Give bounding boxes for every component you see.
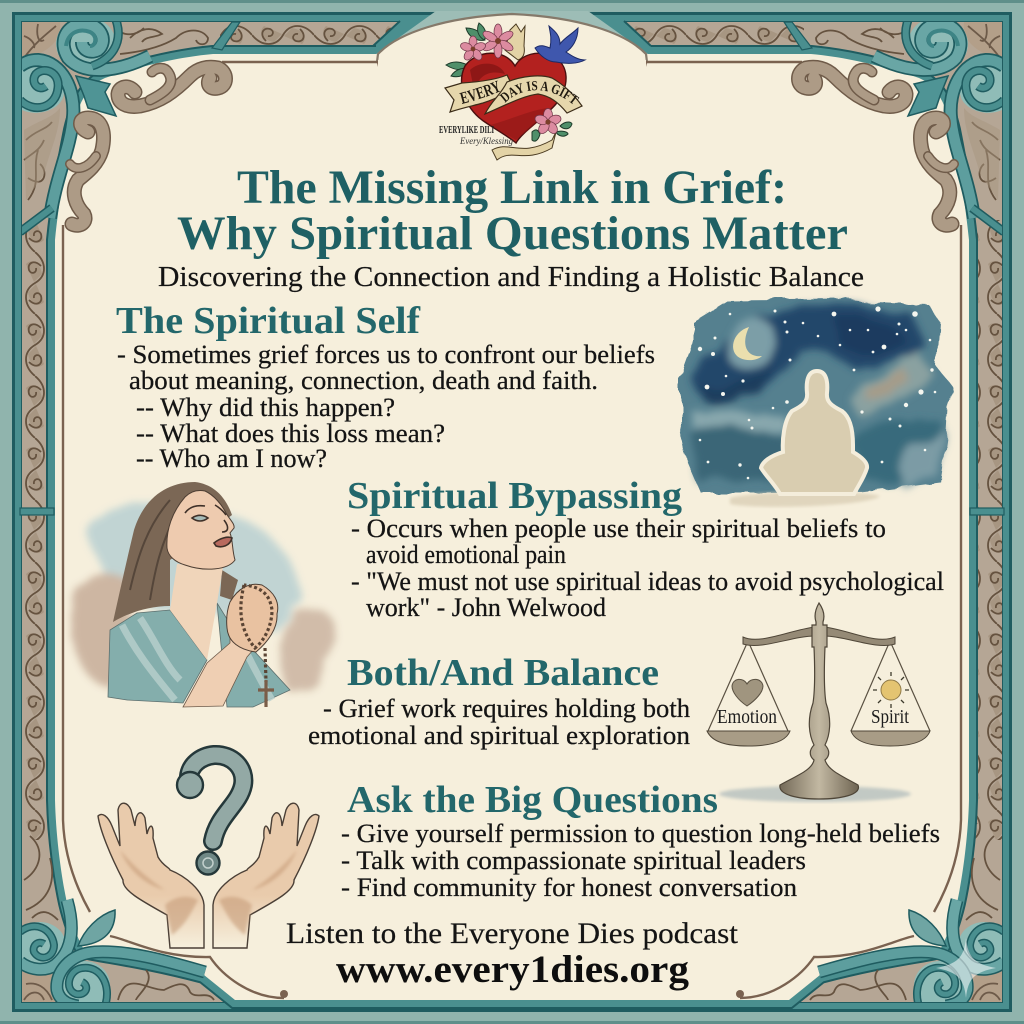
illustration: praying woman <box>74 482 332 707</box>
neck <box>170 564 223 660</box>
logo bluebird <box>535 26 585 63</box>
moon <box>733 327 762 360</box>
logo: heart with ribbon: DAY IS A GIFT <box>499 81 580 104</box>
meditating figure <box>761 371 867 494</box>
text: spiritual self body: about meaning, connection, death and faith. <box>129 366 598 395</box>
text: spiritual bypassing body: - "We must not use spiritual ideas to avoid psychological <box>351 567 944 596</box>
watermark star <box>936 938 996 998</box>
title <box>177 161 848 260</box>
text: spiritual self body: -- What does this loss mean? <box>136 419 445 448</box>
logo: heart with ribbon <box>439 22 587 161</box>
question mark hook <box>177 772 203 798</box>
scale beam <box>743 627 895 645</box>
text: ask the big questions body: - Talk with compassionate spiritual leaders <box>341 846 806 875</box>
scale strings <box>708 641 930 731</box>
question mark dot <box>196 852 220 874</box>
corner ornament top right <box>798 17 1004 232</box>
question mark stem <box>189 755 243 841</box>
heading: ask the big questions: Ask the Big Questions <box>347 779 718 821</box>
text: spiritual bypassing body: work" - John Welwood <box>366 593 606 622</box>
text: spiritual bypassing body: avoid emotional pain <box>366 540 566 569</box>
scale post <box>780 603 858 799</box>
text: spiritual self body: - Sometimes grief forces us to confront our beliefs <box>117 340 655 369</box>
text: spiritual self body: -- Who am I now? <box>136 444 327 473</box>
hair strands <box>130 500 178 600</box>
illustration: balance scale <box>707 603 930 802</box>
illustration: night sky meditation <box>680 300 950 507</box>
heart on scale <box>732 679 763 706</box>
scale pans <box>707 731 930 746</box>
right hand <box>213 803 319 948</box>
illustration: hands and question mark <box>98 755 319 948</box>
heading: spiritual bypassing: Spiritual Bypassing <box>347 475 682 517</box>
subtitle: Discovering the Connection and Finding a Holistic Balance <box>158 262 864 293</box>
sun on scale <box>873 672 909 708</box>
text: spiritual bypassing body <box>351 514 944 622</box>
logo heart <box>462 53 566 143</box>
right hand shading <box>219 850 297 935</box>
stars <box>698 306 936 479</box>
logo ribbon text: EVERY <box>459 80 500 104</box>
left hand <box>98 803 204 948</box>
text: spiritual self body <box>117 340 655 473</box>
text: both and balance body: emotional and spiritual exploration <box>308 721 690 750</box>
footer podcast line: Listen to the Everyone Dies podcast <box>286 917 739 950</box>
text: ask the big questions body: - Give yourself permission to question long-held beliefs <box>341 819 940 848</box>
title: The Missing Link in Grief: <box>237 161 787 214</box>
logo top ribbon end <box>505 24 525 60</box>
logo flower centers <box>471 38 551 125</box>
text: spiritual bypassing body: - Occurs when people use their spiritual beliefs to <box>351 514 886 543</box>
watercolor wash <box>74 504 332 692</box>
title: Why Spiritual Questions Matter <box>177 207 848 260</box>
label spirit: Spirit <box>871 706 909 728</box>
scale shadow <box>719 786 911 802</box>
heading: both and balance: Both/And Balance <box>347 652 659 694</box>
text: spiritual self body: -- Why did this happen? <box>136 393 395 422</box>
ground wash <box>730 492 880 507</box>
text: ask the big questions body <box>341 819 940 902</box>
face <box>167 491 235 569</box>
hair <box>113 482 238 622</box>
logo leaves <box>446 23 572 141</box>
footer website: www.every1dies.org <box>336 948 690 991</box>
logo small text: EVERYLIKE DILI <box>439 125 494 136</box>
logo pink flowers <box>459 24 562 136</box>
corner ornament bottom left <box>14 836 214 1009</box>
logo tail ribbon <box>492 132 556 160</box>
logo: heart with ribbon: Every/Klessing <box>459 136 513 146</box>
shirt folds <box>122 618 272 700</box>
praying hands <box>227 584 278 652</box>
logo ribbon gift <box>485 76 582 114</box>
logo ribbon every <box>445 75 512 112</box>
shirt <box>108 603 290 707</box>
corner ornament bottom right <box>810 836 1010 1009</box>
line end dots <box>280 990 744 998</box>
rosary <box>241 585 274 707</box>
label emotion: Emotion <box>717 706 777 728</box>
text: both and balance body <box>308 694 690 750</box>
facial features <box>185 505 232 547</box>
sky tone bands <box>688 305 945 486</box>
arch behind logo <box>377 14 647 62</box>
sky wash <box>680 300 950 492</box>
arm <box>183 615 273 707</box>
corner ornament top left <box>20 17 226 232</box>
text: both and balance body: - Grief work requires holding both <box>323 694 690 723</box>
heading: the spiritual self: The Spiritual Self <box>116 300 421 342</box>
text: ask the big questions body: - Find community for honest conversation <box>341 873 797 902</box>
left hand shading <box>120 850 198 935</box>
